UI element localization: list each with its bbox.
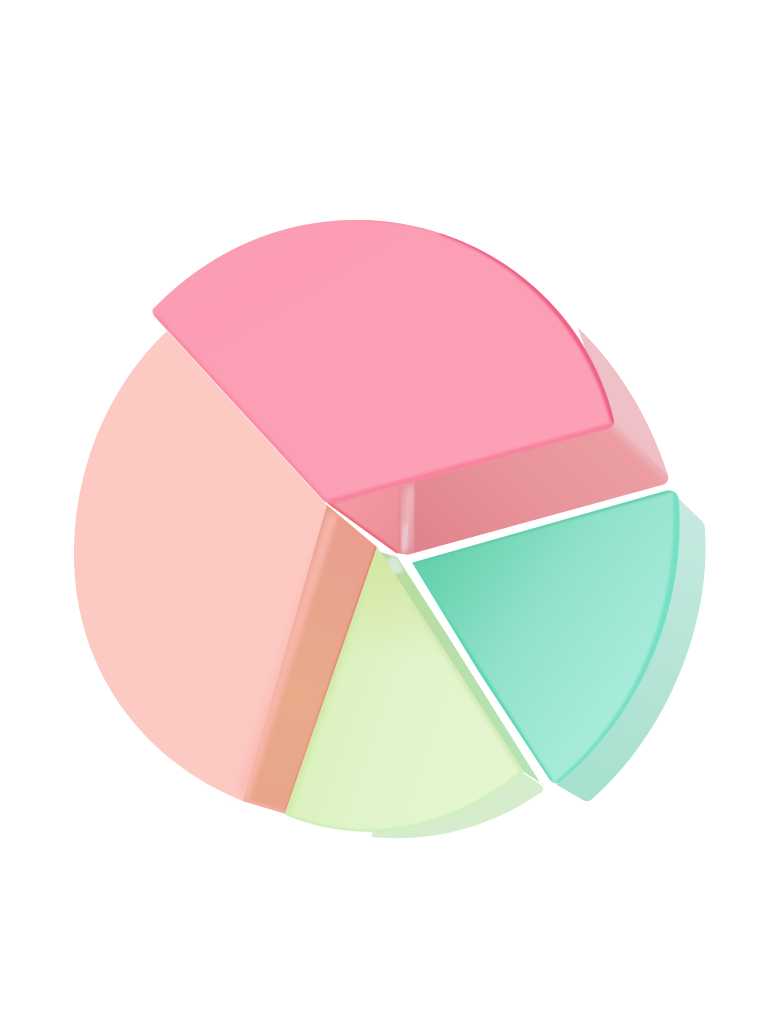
green slice top face — [285, 547, 524, 832]
green slice inner side band — [380, 552, 544, 785]
pink slice top face — [152, 220, 614, 503]
3D pie chart illustration — [74, 220, 706, 838]
green slice back side — [372, 772, 543, 838]
pink slice side face — [327, 328, 668, 555]
white gap between slices — [397, 486, 667, 784]
teal slice back side — [557, 497, 706, 801]
salmon slice top face — [74, 331, 333, 801]
teal slice top face — [409, 490, 680, 785]
salmon slice side face — [243, 505, 377, 814]
